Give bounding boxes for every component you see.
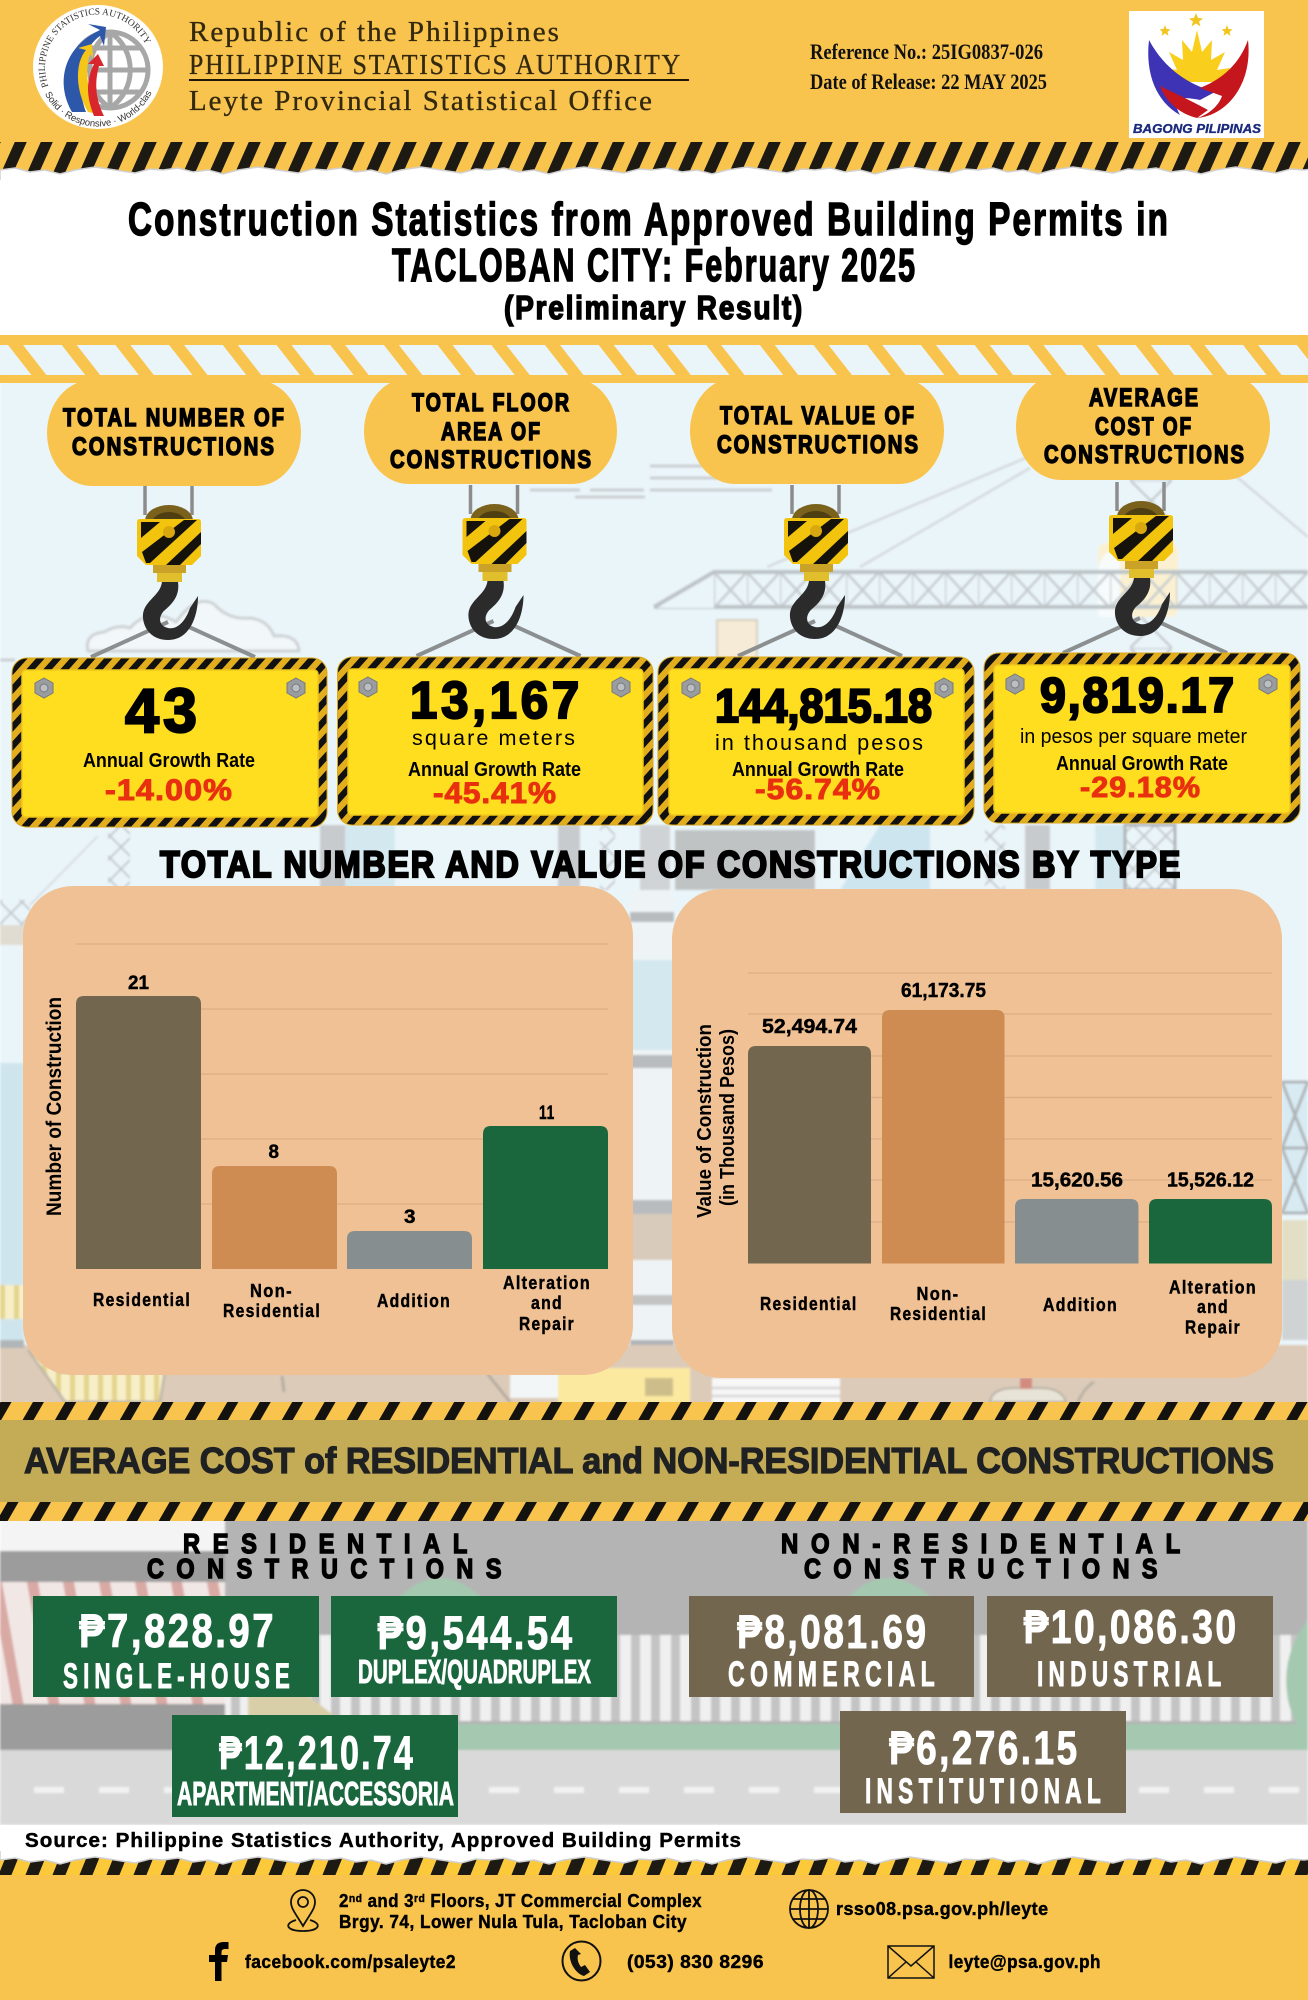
bar: non-residential 8: 8 (268, 1142, 279, 1163)
bar: alteration and repair 15,526.12: and (1197, 1297, 1229, 1317)
card: industrial (987, 1596, 1273, 1697)
card: institutional: ₱6,276.15 (889, 1721, 1080, 1774)
white title background (0, 180, 1308, 340)
reference number and release date: Date of Release: 22 MAY 2025 (810, 69, 1047, 94)
bar: addition 3: 3 (404, 1207, 416, 1228)
pill: total value of constructions: CONSTRUCTIONS (717, 431, 920, 459)
hook assembly 4 (1063, 482, 1227, 653)
panel: number of construction bar chart (23, 886, 633, 1375)
bar: alteration and repair 11: Alteration (503, 1273, 591, 1293)
address text: Brgy. 74, Lower Nula Tula, Tacloban City (339, 1912, 687, 1932)
sign: total floor area value: square meters (412, 727, 577, 750)
card: single-house: SINGLE-HOUSE (63, 1657, 295, 1696)
pill: average cost of constructions: AVERAGE (1089, 384, 1200, 412)
background: construction scene (0, 340, 1308, 1405)
sign: average cost value (984, 653, 1300, 823)
heading: residential constructions (147, 1528, 514, 1584)
card: duplex/quadruplex: ₱9,544.54 (378, 1606, 574, 1659)
pill: total number of constructions (47, 380, 301, 486)
sign: total value: 144,815.18 (715, 679, 932, 732)
card: single-house (33, 1596, 319, 1697)
pill: total value of constructions (690, 378, 944, 484)
heading: non-residential constructions: CONSTRUCTIONS (804, 1553, 1170, 1584)
bar: alteration and repair 15,526.12: Repair (1185, 1318, 1241, 1338)
sign: total floor area value: 13,167 (410, 672, 583, 730)
card: duplex/quadruplex (331, 1596, 617, 1697)
pill: average cost of constructions: CONSTRUCTIONS (1044, 441, 1246, 469)
card: commercial: COMMERCIAL (728, 1655, 940, 1694)
icon: PSA logo: PHILIPPINE STATISTICS AUTHORITY (38, 8, 152, 88)
title: (Preliminary Result) (504, 289, 804, 326)
agency name block: PHILIPPINE STATISTICS AUTHORITY (189, 50, 682, 81)
bar: alteration and repair 15,526.12: 15,526.12 (1167, 1170, 1254, 1192)
pill: total value of constructions: TOTAL VALUE OF (720, 402, 916, 430)
card: apartment/accessoria (172, 1715, 458, 1817)
bar: addition 3: Addition (377, 1291, 451, 1311)
bar: non-residential 61,173.75: 61,173.75 (901, 980, 986, 1002)
icon: Bagong Pilipinas logo (1129, 11, 1264, 138)
heading: non-residential constructions: NON-RESIDENTIAL (781, 1528, 1193, 1559)
pill: total floor area of constructions: TOTAL FLOOR (412, 389, 571, 417)
address text: rd (414, 1893, 425, 1905)
sign: total value (658, 657, 974, 825)
footer: facebook (209, 1942, 456, 1981)
hook assembly 1 (91, 486, 255, 657)
sign: average cost value: -29.18% (1080, 772, 1201, 804)
icon: globe (790, 1890, 828, 1928)
card: single-house: ₱7,828.97 (79, 1604, 276, 1657)
bar: addition 15,620.56: Addition (1043, 1295, 1118, 1315)
axis label: Number of Construction (43, 997, 66, 1216)
bar: residential 52,494.74: Residential (760, 1294, 858, 1314)
hazard tape above average cost band (0, 1402, 1308, 1421)
reference number and release date (810, 39, 1047, 94)
footer background (0, 1875, 1308, 2000)
address text: nd (349, 1893, 362, 1905)
bar: residential 21: 21 (128, 973, 149, 994)
address text: 2 (339, 1891, 350, 1911)
pill: total number of constructions: CONSTRUCTIONS (72, 433, 276, 461)
bar: addition 15,620.56: 15,620.56 (1031, 1170, 1123, 1192)
bar: addition 3 (347, 1207, 472, 1311)
axis label: Value of Construction (694, 1024, 716, 1218)
pill: average cost of constructions (1016, 374, 1270, 480)
bar: alteration and repair 11: Repair (519, 1314, 575, 1334)
footer: website (790, 1890, 1048, 1928)
card: commercial: ₱8,081.69 (737, 1605, 928, 1658)
footer: website: rsso08.psa.gov.ph/leyte (836, 1899, 1048, 1919)
pill: average cost of constructions: COST OF (1095, 413, 1193, 441)
bar: residential 52,494.74 (748, 1016, 871, 1314)
bar: non-residential 61,173.75: Non- (916, 1284, 960, 1304)
sign: average cost value: in pesos per square meter (1020, 726, 1247, 748)
sign: total value: in thousand pesos (715, 730, 925, 755)
source line: Source: Philippine Statistics Authority, Approved Building Permits (25, 1830, 742, 1852)
heading: residential constructions: RESIDENTIAL (183, 1528, 480, 1559)
bar: residential 52,494.74: 52,494.74 (762, 1016, 858, 1038)
bar: alteration and repair 11 (483, 1103, 608, 1334)
heading: number and value by type: TOTAL NUMBER AND VALUE OF CONSTRUCTIONS BY TYPE (160, 844, 1182, 885)
bar: residential 21 (76, 973, 201, 1310)
pill: total floor area of constructions (364, 378, 617, 484)
bar: non-residential 8: Non- (250, 1281, 293, 1301)
bar: residential 21: Residential (93, 1290, 191, 1310)
bar: addition 15,620.56 (1015, 1170, 1138, 1315)
address text (339, 1891, 702, 1932)
sign: total floor area value: -45.41% (433, 777, 557, 810)
axis label (694, 1024, 739, 1218)
street scene background (0, 1515, 1308, 1825)
sign: total number value: -14.00% (105, 774, 233, 807)
card: apartment/accessoria: ₱12,210.74 (219, 1726, 415, 1779)
banner: average cost heading (0, 1420, 1308, 1502)
icon: Bagong Pilipinas logo: BAGONG PILIPINAS (1133, 121, 1261, 136)
bar: non-residential 8: Residential (223, 1301, 321, 1321)
icon: envelope (888, 1946, 934, 1978)
bar: non-residential 61,173.75 (882, 980, 1004, 1324)
sign: total number value: 43 (125, 677, 201, 746)
icon: phone (562, 1942, 600, 1980)
address text: and 3 (362, 1891, 414, 1911)
bar: non-residential 8 (212, 1142, 337, 1321)
axis label: (in Thousand Pesos) (717, 1029, 739, 1206)
address text: Floors, JT Commercial Complex (425, 1891, 702, 1911)
title (128, 193, 1170, 326)
sign: average cost value: Annual Growth Rate (1056, 753, 1228, 775)
card: institutional (840, 1711, 1126, 1813)
pill: total floor area of constructions: AREA OF (441, 418, 542, 446)
hook assembly 3 (738, 485, 902, 656)
footer: email (888, 1946, 1101, 1978)
bar: alteration and repair 11: 11 (539, 1103, 555, 1124)
card: institutional: INSTITUTIONAL (865, 1772, 1106, 1811)
agency name block: Republic of the Philippines (189, 17, 561, 48)
heading: non-residential constructions (781, 1528, 1193, 1584)
banner: average cost heading: AVERAGE COST of RESIDENTIAL and NON-RESIDENTIAL CONSTRUCTIONS (24, 1440, 1274, 1481)
agency name block (189, 17, 689, 117)
footer: facebook: facebook.com/psaleyte2 (245, 1952, 456, 1972)
pill: total number of constructions: TOTAL NUMBER OF (63, 404, 286, 432)
card: commercial (689, 1596, 974, 1697)
card: industrial: ₱10,086.30 (1024, 1600, 1238, 1653)
bar: alteration and repair 15,526.12 (1149, 1170, 1272, 1338)
footer hazard tape (0, 1845, 1308, 1880)
reference number and release date: Reference No.: 25IG0837-026 (810, 39, 1043, 64)
footer: phone: (053) 830 8296 (627, 1952, 764, 1972)
heading: residential constructions: CONSTRUCTIONS (147, 1553, 514, 1584)
panel: value of construction bar chart (672, 889, 1282, 1378)
striped girder band (0, 335, 1308, 383)
hazard tape below average cost band (0, 1502, 1308, 1521)
sign: total floor area value: Annual Growth Rate (408, 759, 581, 781)
sign: total value: -56.74% (755, 774, 881, 806)
sign: total number value: Annual Growth Rate (83, 750, 255, 772)
footer: email: leyte@psa.gov.ph (948, 1952, 1101, 1972)
sign: total floor area value (338, 657, 653, 825)
sign: total number value (12, 658, 327, 827)
hook assembly 2 (416, 485, 580, 656)
card: apartment/accessoria: APARTMENT/ACCESSORIA (177, 1775, 454, 1812)
hazard tape: header (0, 142, 1308, 190)
sign: average cost value: 9,819.17 (1040, 669, 1236, 723)
card: duplex/quadruplex: DUPLEX/QUADRUPLEX (358, 1653, 591, 1690)
icon: map pin (288, 1890, 318, 1931)
bar: non-residential 61,173.75: Residential (890, 1304, 987, 1324)
footer: phone (562, 1942, 764, 1980)
header background (0, 0, 1308, 175)
pill: total floor area of constructions: CONSTRUCTIONS (390, 446, 593, 474)
bar: alteration and repair 15,526.12: Alteration (1169, 1278, 1257, 1298)
footer: address (288, 1890, 702, 1932)
title: TACLOBAN CITY: February 2025 (392, 239, 917, 291)
bar: alteration and repair 11: and (531, 1293, 563, 1313)
sign: total value: Annual Growth Rate (732, 759, 904, 781)
source band (0, 1825, 1308, 1851)
icon: facebook f (209, 1942, 228, 1981)
agency name block: Leyte Provincial Statistical Office (189, 86, 654, 117)
